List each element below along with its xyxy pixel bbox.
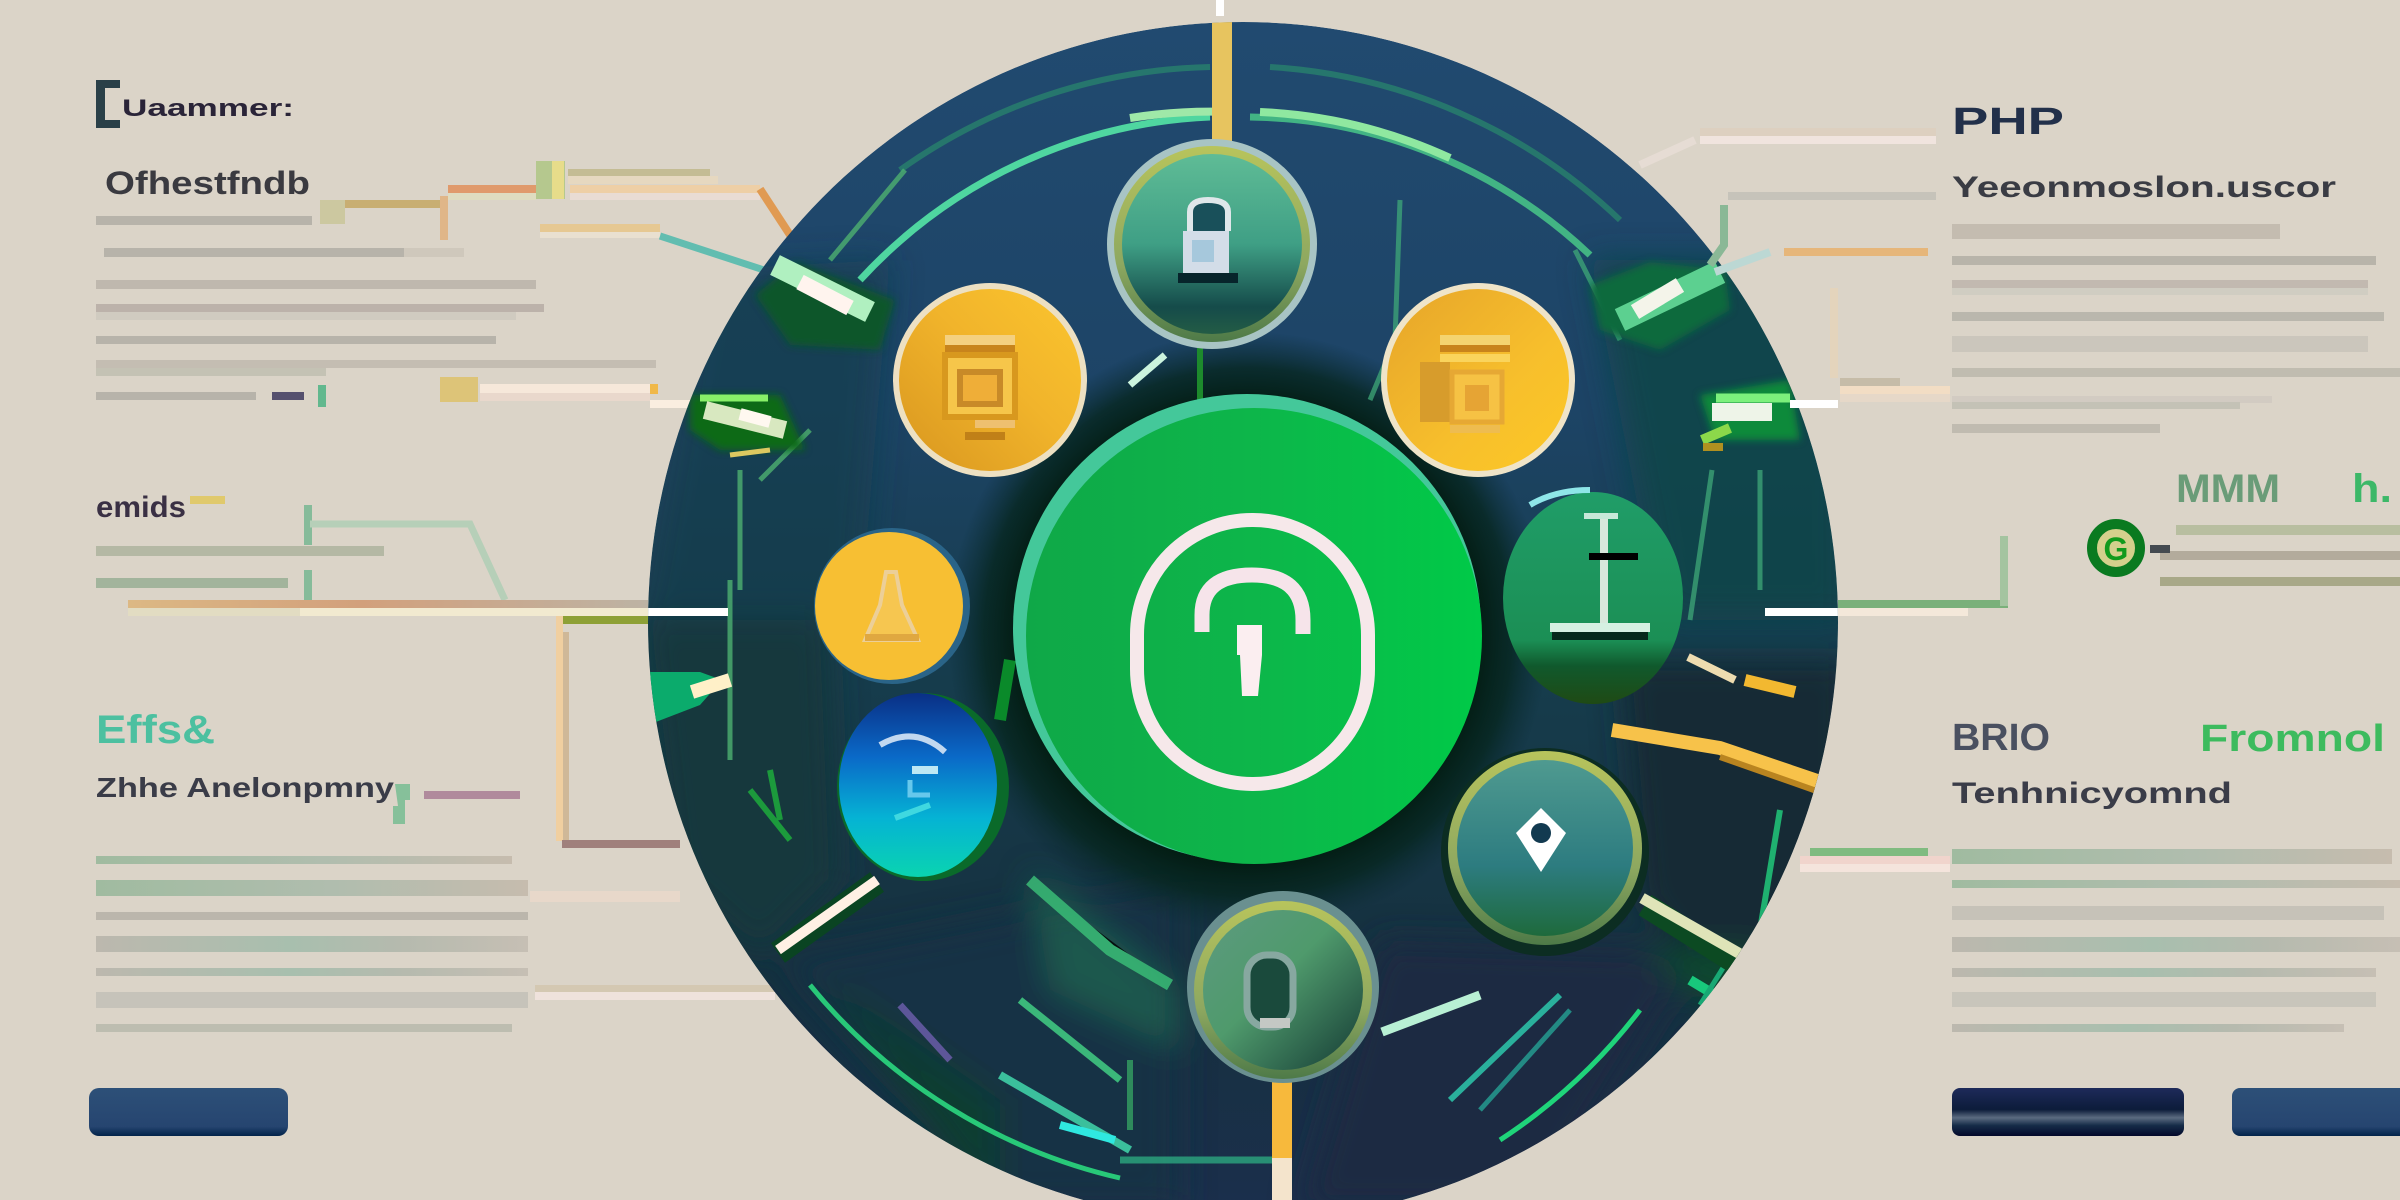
small body lines — [2176, 525, 2400, 535]
text block: top right — [1952, 101, 2400, 433]
padlock body — [1183, 231, 1229, 273]
keyhole outline — [1137, 520, 1368, 784]
icon: yellow badge left — [893, 283, 1087, 477]
text block: lower right — [1952, 717, 2400, 1032]
icon: bottom badge — [1187, 891, 1379, 1083]
callout: middle right: h. — [2352, 467, 2392, 511]
disc base — [648, 22, 1838, 1200]
connector lines: upper left — [272, 161, 792, 408]
text block: top left — [96, 80, 656, 400]
icon: padlock badge — [1107, 139, 1317, 349]
icon: green letter badge — [2092, 524, 2140, 572]
heading: Uaammer: — [122, 95, 294, 122]
body lines — [1952, 849, 2400, 1032]
body lines — [96, 546, 384, 588]
icon: yellow badge right — [1381, 283, 1575, 477]
bottom spoke — [1272, 1078, 1292, 1200]
icon: small yellow badge — [814, 528, 970, 684]
main disc — [640, 22, 1850, 1200]
subheading: Tenhnicyomnd — [1952, 777, 2232, 810]
body lines — [96, 856, 528, 1032]
green headings: MMM — [2176, 467, 2280, 511]
top green arcs — [860, 117, 1210, 280]
gold streak: upper right — [1688, 657, 1795, 692]
inner arch — [1202, 575, 1303, 634]
top spoke stub above disc — [1216, 0, 1224, 16]
subheading: Zhhe Anelonpmny — [96, 772, 395, 803]
subheading: Yeeonmoslon.uscor — [1952, 171, 2336, 204]
heading: PHP — [1952, 101, 2064, 143]
callout: middle right — [2092, 467, 2400, 586]
tab: top right — [1590, 262, 1730, 350]
heading: emids — [96, 491, 186, 524]
padlock shackle — [1190, 200, 1228, 231]
tab: mid left — [690, 395, 805, 455]
yellow accent bar — [190, 496, 225, 504]
heading: BRIO — [1952, 717, 2050, 759]
button: lower left — [89, 1088, 288, 1136]
body lines — [96, 216, 656, 400]
central green circle — [1013, 394, 1482, 864]
key stem — [1237, 625, 1262, 696]
bracket mark — [96, 80, 120, 128]
icon: green letter badge: G — [2104, 531, 2128, 567]
darker sectors — [640, 260, 1850, 1200]
button: lower right, dark — [1952, 1088, 2184, 1136]
button: lower right, blue — [2232, 1088, 2400, 1136]
text block: middle left — [96, 491, 384, 588]
icon: green badge right — [1503, 490, 1683, 704]
shadow around center — [948, 332, 1548, 932]
top spoke — [1212, 22, 1232, 146]
subheading: Ofhestfndb — [105, 165, 310, 201]
accent — [393, 784, 410, 824]
gold streak: lower right — [1612, 730, 1832, 795]
lower bright arcs — [810, 985, 1120, 1178]
connector lines: upper right — [1640, 128, 2008, 872]
connector lines: middle left — [128, 505, 775, 1000]
tab: top left — [755, 262, 895, 350]
text block: lower left — [96, 708, 528, 1032]
tab: lower left — [648, 672, 730, 725]
side circuit lines — [730, 170, 905, 760]
heading: Effs& — [96, 708, 215, 752]
tab: mid right — [1700, 380, 1800, 451]
body lines — [1952, 224, 2400, 433]
light bar: lower right — [1642, 898, 1745, 968]
green heading: Fromnol — [2200, 718, 2385, 760]
white line stubs — [648, 608, 728, 616]
location glyph — [1516, 808, 1566, 872]
icon: blue badge — [837, 693, 1009, 881]
icon: emerald badge — [1441, 748, 1649, 956]
light bar: lower left — [778, 880, 877, 953]
